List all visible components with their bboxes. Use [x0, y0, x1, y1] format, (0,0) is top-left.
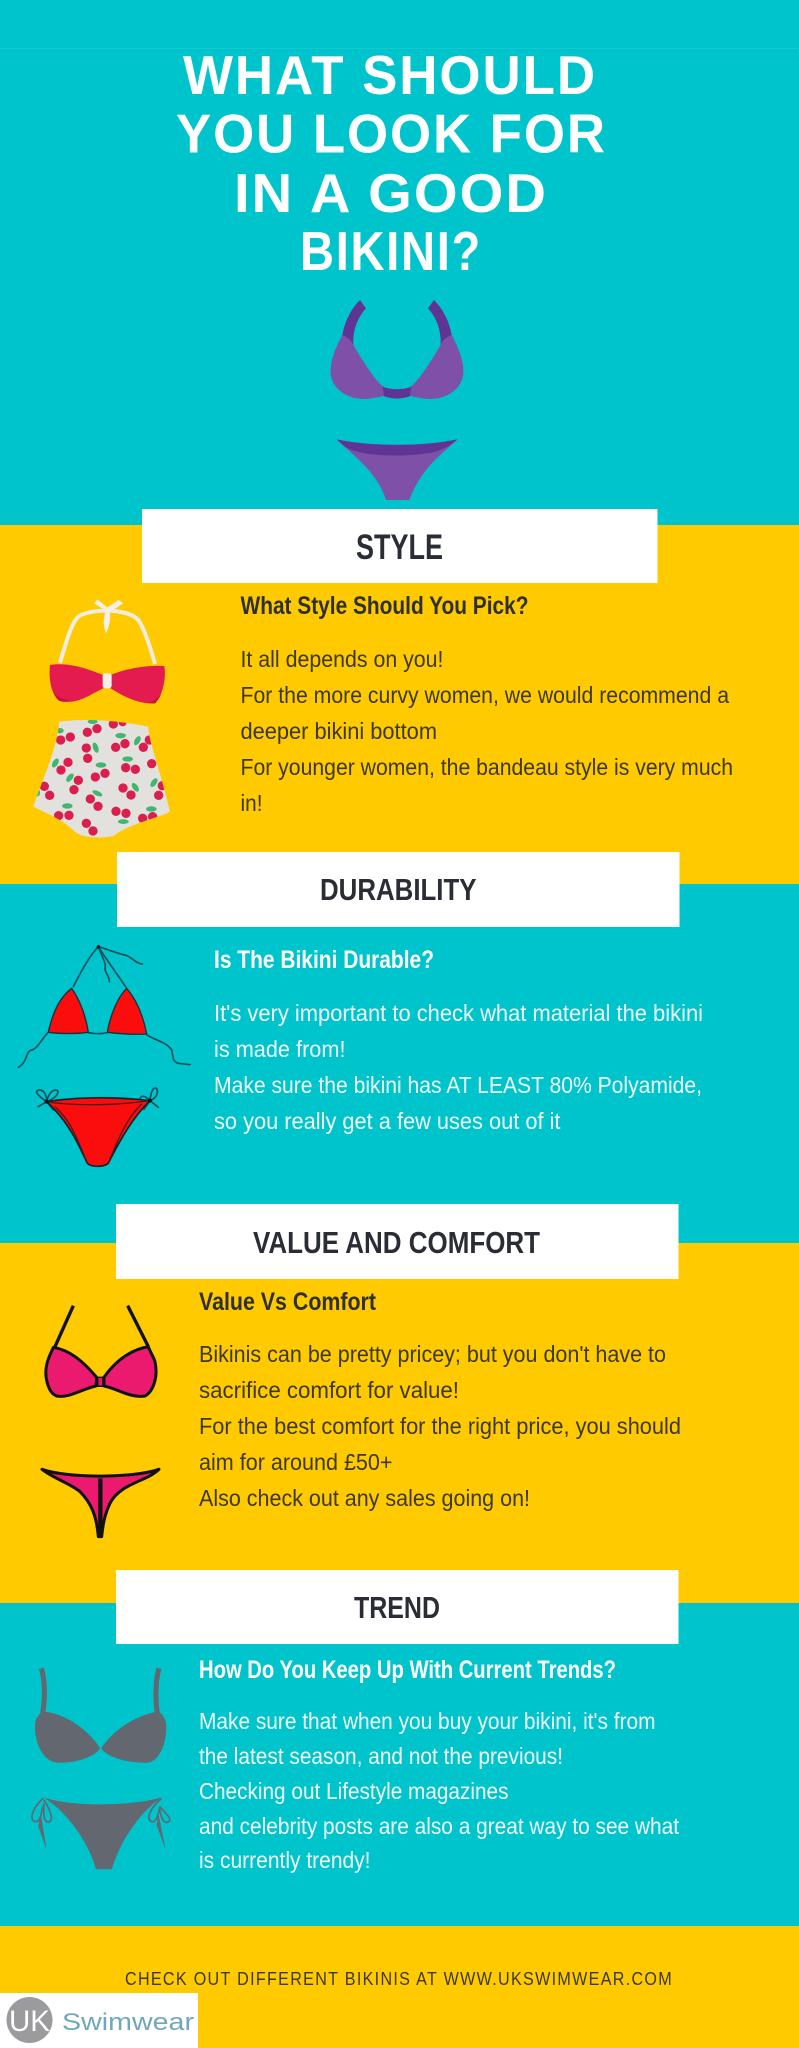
text block: value and comfort: For the best comfort for the right price, you should	[199, 1413, 681, 1439]
panel: style	[0, 509, 799, 884]
text block: trend	[199, 1708, 680, 1873]
text block: style: in!	[240, 790, 262, 816]
text block: durability: is made from!	[214, 1036, 346, 1062]
heading box: value and comfort	[116, 1204, 678, 1279]
title: IN A GOOD	[234, 162, 548, 224]
icon: red halter top and cherry high-waist bottom	[33, 599, 170, 837]
icon: purple bikini	[331, 300, 463, 500]
subheading: style: What Style Should You Pick?	[240, 592, 528, 620]
panel: durability	[0, 852, 799, 1243]
title	[176, 44, 607, 282]
text block: trend: is currently trendy!	[199, 1847, 370, 1873]
text block: value and comfort: Bikinis can be pretty pricey; but you don't have to	[199, 1341, 666, 1367]
text block: trend: and celebrity posts are also a great way to see what	[199, 1813, 680, 1839]
logo: UK Swimwear: Swimwear	[62, 2009, 194, 2036]
heading box: style	[142, 509, 658, 583]
heading box: value and comfort: VALUE AND COMFORT	[253, 1225, 540, 1260]
text block: style: It all depends on you!	[240, 646, 444, 672]
icon: red string bikini	[18, 945, 190, 1166]
text block: trend: Checking out Lifestyle magazines	[199, 1778, 508, 1804]
panel: footer	[0, 1926, 799, 2048]
text block: value and comfort: aim for around £50+	[199, 1449, 392, 1475]
call to action text: CHECK OUT DIFFERENT BIKINIS AT WWW.UKSWIMWEAR.COM	[125, 1968, 673, 1989]
icon: pink bikini	[42, 1306, 159, 1537]
text block: style: For younger women, the bandeau style is very much	[240, 754, 733, 780]
logo: UK Swimwear: UK	[9, 2005, 50, 2038]
panel: hero	[0, 0, 799, 525]
icon: grey bikini	[32, 1668, 170, 1869]
text block: durability: It's very important to check what material the bikini	[214, 1000, 703, 1026]
text block: trend: Make sure that when you buy your bikini, it's from	[199, 1708, 656, 1734]
heading box: style: STYLE	[356, 528, 443, 567]
heading box: durability	[117, 852, 680, 927]
heading box: durability: DURABILITY	[320, 872, 477, 907]
subheading: durability: Is The Bikini Durable?	[214, 946, 434, 974]
panel: trend	[0, 1570, 799, 1926]
text block: value and comfort: sacrifice comfort for value!	[199, 1377, 459, 1403]
text block: style: deeper bikini bottom	[240, 718, 437, 744]
title: YOU LOOK FOR	[176, 102, 607, 164]
text block: style	[240, 646, 733, 816]
title: BIKINI?	[300, 220, 482, 282]
subheading: value and comfort: Value Vs Comfort	[199, 1288, 377, 1316]
title: WHAT SHOULD	[183, 44, 597, 106]
heading box: trend	[116, 1570, 678, 1644]
subheading: trend: How Do You Keep Up With Current Trends?	[199, 1656, 616, 1684]
logo: UK Swimwear	[0, 1993, 198, 2048]
panel: value and comfort	[0, 1204, 799, 1603]
text block: durability: so you really get a few uses out of it	[214, 1108, 561, 1134]
text block: style: For the more curvy women, we would recommend a	[240, 682, 729, 708]
text block: trend: the latest season, and not the previous!	[199, 1743, 563, 1769]
heading box: trend: TREND	[354, 1590, 440, 1625]
text block: value and comfort	[199, 1341, 681, 1511]
text block: value and comfort: Also check out any sales going on!	[199, 1485, 530, 1511]
text block: durability	[214, 1000, 703, 1134]
text block: durability: Make sure the bikini has AT LEAST 80% Polyamide,	[214, 1072, 702, 1098]
